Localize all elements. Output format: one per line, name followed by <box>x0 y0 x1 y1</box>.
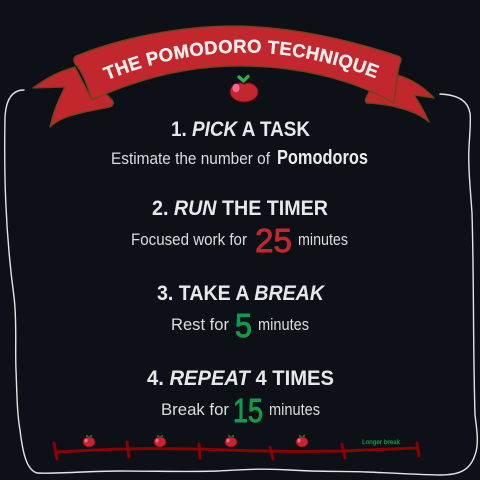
step 3 description: Rest for <box>171 315 229 334</box>
step 1 description: Estimate the number of <box>111 149 270 168</box>
step 2 heading: 2. RUN THE TIMER <box>152 197 328 220</box>
step 2 unit: minutes <box>298 230 348 249</box>
step 4 heading: 4. REPEAT 4 TIMES <box>147 367 334 390</box>
banner left tail <box>33 67 113 127</box>
step 2 <box>131 197 348 259</box>
step 3 unit: minutes <box>258 315 309 334</box>
timeline tomato 1 <box>83 434 95 447</box>
step 4 description: Break for <box>161 400 229 419</box>
step 2 description: Focused work for <box>131 230 247 249</box>
timeline tomato 3 <box>225 434 237 447</box>
hand-drawn white border frame <box>5 90 477 475</box>
step 1 emphasis: Pomodoros <box>277 147 368 169</box>
step 4 unit: minutes <box>269 400 320 419</box>
banner right tail <box>365 75 434 122</box>
timeline tomato 4 <box>296 434 308 447</box>
step 1 <box>111 118 368 169</box>
timeline tomato 2 <box>154 434 166 447</box>
step 1 heading: 1. PICK A TASK <box>171 118 310 141</box>
step 4 number: 15 <box>233 392 263 429</box>
longer break label: Longer break <box>362 439 401 446</box>
step 2 number: 25 <box>255 222 292 259</box>
timeline <box>54 434 419 459</box>
step 3 heading: 3. TAKE A BREAK <box>157 282 326 305</box>
banner ribbon <box>32 25 435 128</box>
step 4 <box>147 367 334 429</box>
banner main band <box>74 26 401 103</box>
banner title: THE POMODORO TECHNIQUE <box>102 40 380 79</box>
icon: tomato <box>230 76 258 102</box>
step 3 <box>157 282 326 344</box>
timeline axis and ticks <box>54 442 419 459</box>
step 3 number: 5 <box>235 307 252 344</box>
